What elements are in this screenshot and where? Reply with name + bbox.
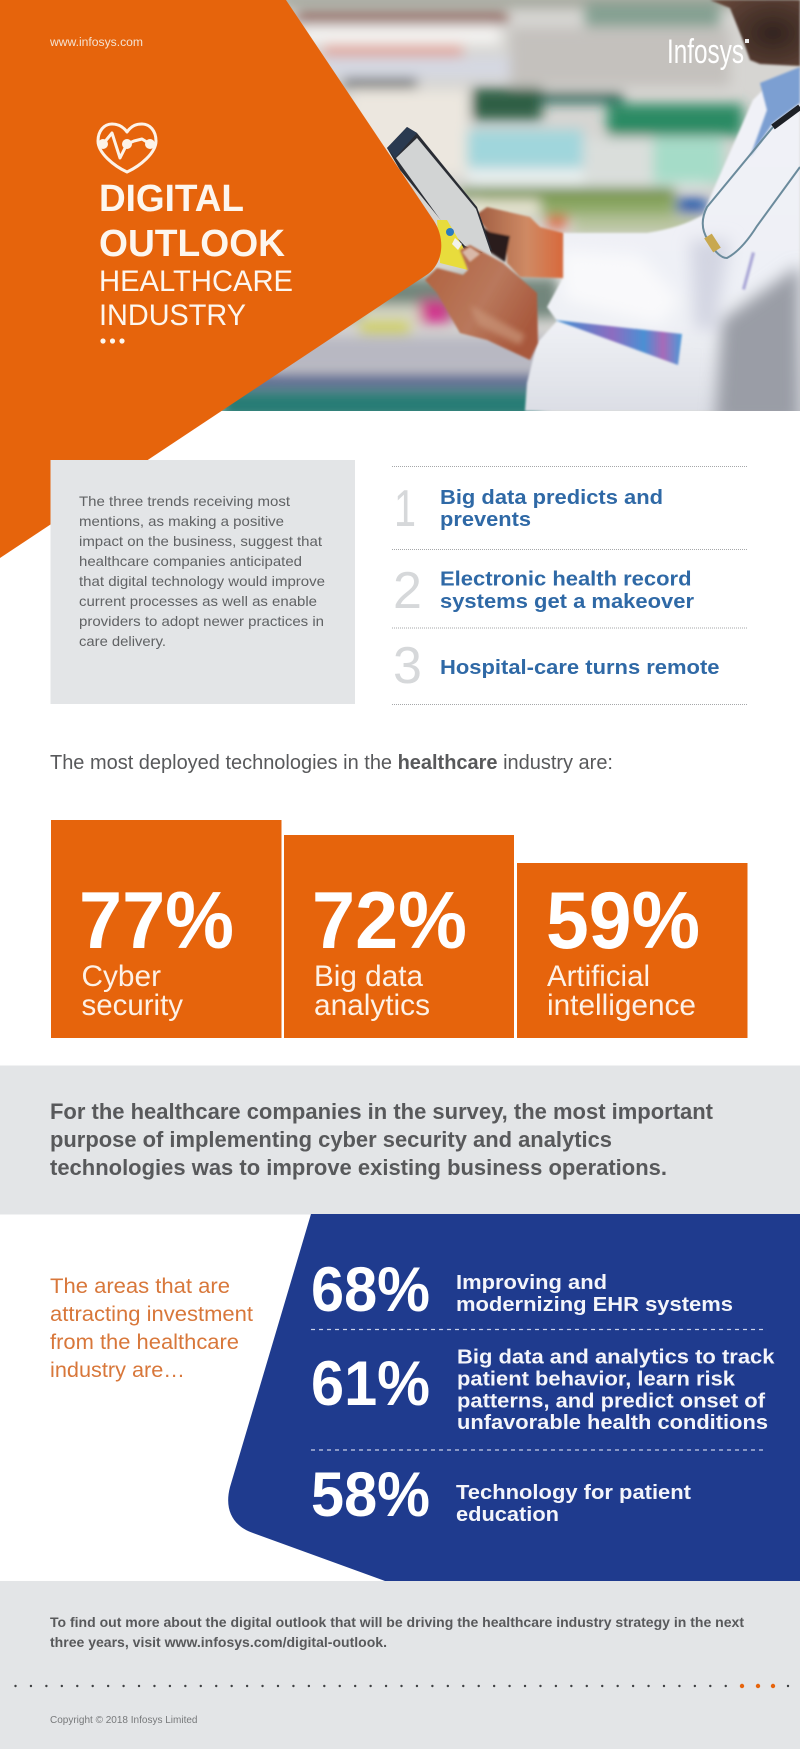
item: 68%: 68% [311, 1255, 430, 1325]
item: 58%: Technology for patient [456, 1482, 691, 1504]
website url: www.infosys.com [49, 37, 143, 49]
photo: doctor holding tablet [220, 0, 800, 425]
doctor face and neck [710, 0, 800, 66]
trend 3 [393, 637, 720, 695]
trend 2: systems get a makeover [440, 591, 694, 613]
footer call to action: To find out more about the digital outlook that will be driving the healthcare industry strategy in the next [50, 1615, 745, 1630]
bar: big data analytics: Big data [314, 960, 423, 993]
intro paragraph: care delivery. [79, 634, 166, 649]
item: 58%: education [456, 1504, 559, 1526]
footer call to action: three years, visit www.infosys.com/digital-outlook. [50, 1635, 387, 1650]
bar: artificial intelligence [517, 863, 748, 1038]
intro paragraph: current processes as well as enable [79, 594, 317, 609]
callout: investment areas intro: The areas that are [50, 1274, 230, 1298]
bar: cyber security: Cyber [82, 960, 161, 993]
trend 3: Hospital-care turns remote [440, 657, 720, 679]
item: 68%: Improving and [456, 1272, 607, 1294]
panel: survey statement: technologies was to improve existing business operations. [50, 1155, 667, 1180]
bar: artificial intelligence: Artificial [547, 960, 650, 993]
item: 68% [311, 1255, 733, 1325]
item: 58%: 58% [311, 1460, 430, 1530]
title: HEALTHCARE [99, 265, 293, 298]
trend 3: 3 [393, 637, 422, 695]
trend 1: Big data predicts and [440, 487, 663, 509]
bar: big data analytics: analytics [314, 989, 430, 1022]
title: INDUSTRY [99, 299, 246, 332]
bar: cyber security: 77% [79, 876, 234, 966]
callout: investment areas intro: from the healthcare [50, 1330, 239, 1354]
trend 2: Electronic health record [440, 568, 692, 590]
panel: investment areas [228, 1214, 800, 1581]
panel: intro text [50, 460, 355, 704]
panel: three trends list [392, 466, 748, 704]
tablet [387, 127, 492, 270]
callout: investment areas intro [50, 1274, 253, 1382]
item: 61%: patient behavior, learn risk [457, 1368, 736, 1390]
trend 2: 2 [393, 562, 422, 620]
rear hand [473, 207, 563, 278]
callout: investment areas intro: industry are… [50, 1358, 185, 1382]
lab coat [525, 70, 800, 425]
bar: cyber security: security [82, 989, 183, 1022]
bar: big data analytics [284, 835, 514, 1038]
intro paragraph [79, 494, 325, 649]
item: 68%: modernizing EHR systems [456, 1294, 733, 1316]
intro paragraph: mentions, as making a positive [79, 514, 284, 529]
item: 61%: 61% [311, 1349, 430, 1419]
item: 61%: Big data and analytics to track [457, 1346, 775, 1368]
title dots [100, 338, 125, 344]
footer dotted line [16, 1684, 789, 1688]
panel: survey statement [0, 1066, 800, 1214]
item: 61% [311, 1346, 775, 1434]
intro paragraph: healthcare companies anticipated [79, 554, 302, 569]
coat shading [560, 240, 800, 425]
copyright: Copyright © 2018 Infosys Limited [50, 1715, 198, 1726]
icon: heart with pulse [98, 124, 156, 172]
front hand [425, 245, 538, 360]
Infosys logo: Infosys [667, 33, 744, 71]
chart: deployed technologies bars [51, 820, 748, 1038]
title [99, 178, 293, 332]
callout: investment areas intro: attracting investment [50, 1302, 253, 1326]
section heading: most deployed technologies: The most deployed technologies in the healthcare industry are: [50, 752, 613, 774]
trend 1: prevents [440, 509, 531, 531]
trend 1: 1 [394, 480, 416, 538]
footer call to action [50, 1615, 745, 1650]
trend 1 [394, 480, 663, 538]
item: 58% [311, 1460, 691, 1530]
item: 61%: unfavorable health conditions [457, 1412, 768, 1434]
panel: footer [0, 1581, 800, 1749]
title: DIGITAL [99, 178, 244, 220]
panel: survey statement: For the healthcare companies in the survey, the most important [50, 1099, 714, 1124]
bar: artificial intelligence: intelligence [547, 989, 696, 1022]
shirt collar [750, 67, 800, 157]
gap between sleeves [555, 320, 682, 365]
panel: survey statement: purpose of implementing cyber security and analytics [50, 1127, 612, 1152]
bar: big data analytics: 72% [312, 876, 467, 966]
bar: artificial intelligence: 59% [546, 876, 700, 966]
intro paragraph: impact on the business, suggest that [79, 534, 322, 549]
bar: cyber security [51, 820, 282, 1038]
intro paragraph: providers to adopt newer practices in [79, 614, 324, 629]
intro paragraph: that digital technology would improve [79, 574, 325, 589]
intro paragraph: The three trends receiving most [79, 494, 290, 509]
title: OUTLOOK [99, 223, 286, 265]
header orange shape [0, 0, 441, 558]
item: 61%: patterns, and predict onset of [457, 1390, 765, 1412]
stethoscope [703, 107, 800, 258]
trend 2 [393, 562, 694, 620]
